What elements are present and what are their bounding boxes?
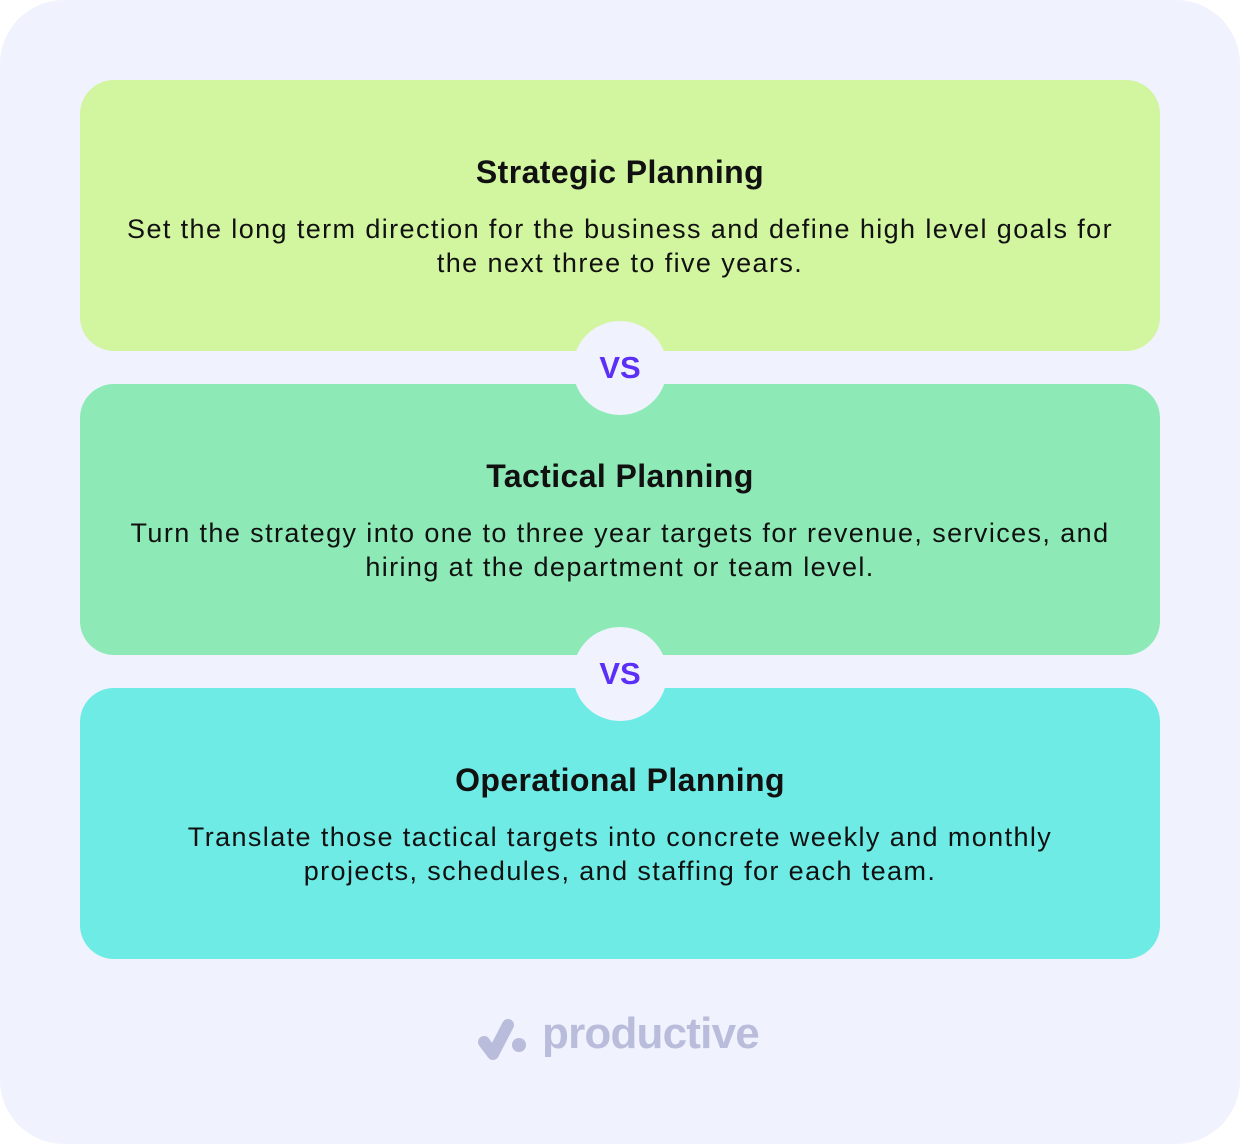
logo: productive [478,1009,759,1060]
vs badge 1: VS [599,350,641,385]
text: tactical description [131,518,1109,582]
text: operational description: Translate those tactical targets into concrete weekly and monthly [188,822,1052,852]
panel: tactical planning [80,384,1160,655]
text: operational description [188,822,1052,886]
logo text: productive [542,1009,759,1058]
heading: strategic: Strategic Planning [476,154,764,190]
icon: logo mark [478,1019,526,1060]
heading: tactical: Tactical Planning [486,458,754,494]
text: strategic description: the next three to five years. [437,248,803,278]
panel: strategic planning [80,80,1160,351]
vs badge 2 [573,627,667,721]
vs badge 1 [573,321,667,415]
panel: operational planning [80,688,1160,959]
heading: operational: Operational Planning [455,762,785,798]
text: strategic description: Set the long term direction for the business and define high level goals for [127,214,1113,244]
text: operational description: projects, schedules, and staffing for each team. [304,856,936,886]
vs badge 2: VS [599,656,641,691]
text: tactical description: Turn the strategy into one to three year targets for revenue, services, and [131,518,1109,548]
text: strategic description [127,214,1113,278]
text: tactical description: hiring at the department or team level. [365,552,875,582]
